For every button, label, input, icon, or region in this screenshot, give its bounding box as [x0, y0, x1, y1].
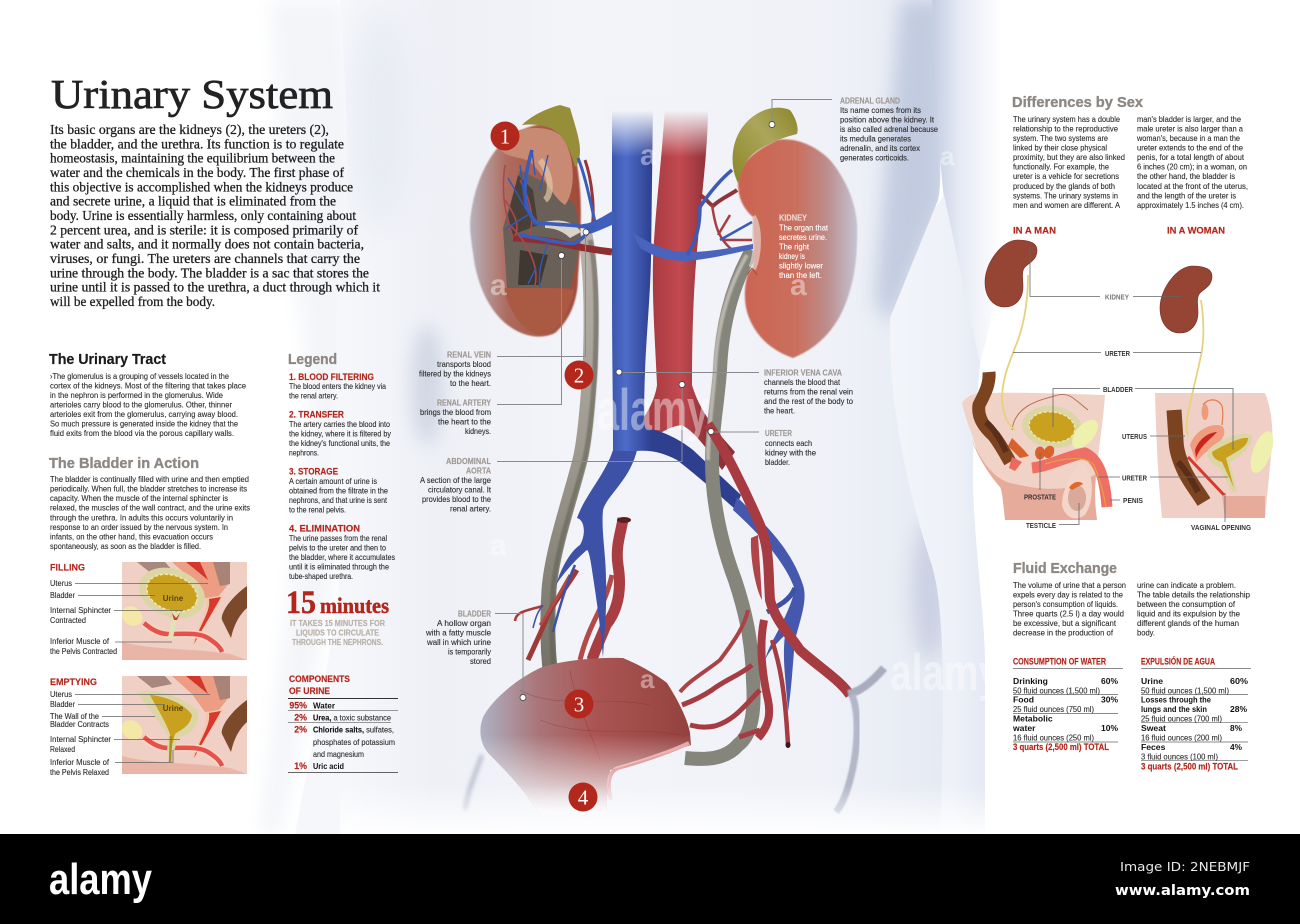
section: fluid exchange: liquid and its expulsion by the — [1137, 608, 1240, 618]
leader lines — [495, 100, 832, 697]
left leg veins and arteries — [515, 450, 637, 660]
section: legend: to the renal pelvis. — [289, 504, 346, 514]
label: renal vein — [419, 350, 492, 388]
diagram: emptying: the Pelvis Relaxed — [50, 767, 109, 777]
section: the urinary tract: fluid exits from the blood via the porous capillary walls. — [50, 428, 234, 438]
section: differences by sex: men and women are different. A — [1013, 200, 1120, 210]
table: expulsion of water: lungs and the skin — [1141, 704, 1207, 714]
pelvis body, woman — [1155, 393, 1272, 518]
section: the urinary tract: arterioles exit from the glomerulus, carrying away blood. — [50, 409, 238, 419]
table: expulsion of water: 8% — [1230, 723, 1242, 733]
section: fluid exchange: The table details the relationship — [1137, 590, 1250, 600]
label: abdominal aorta: A section of the large — [420, 475, 491, 485]
table: expulsion of water: 3 quarts (2,500 ml) TOTAL — [1141, 762, 1239, 772]
label: renal vein: RENAL VEIN — [447, 350, 491, 360]
label: bladder: with a fatty muscle — [425, 628, 491, 638]
kidney, woman — [1160, 266, 1212, 333]
number marker 3: 3 — [574, 692, 584, 716]
footer image id: Image ID: 2NEBMJF — [1120, 860, 1250, 874]
label: abdominal aorta: circulatory canal. It — [428, 484, 491, 494]
watermarks: a — [490, 529, 507, 562]
right ureter — [685, 250, 754, 759]
diagram: filling: Inferior Muscle of — [50, 636, 110, 646]
label: ureter: connects each — [765, 438, 812, 448]
table: components of urine: 1% — [294, 761, 307, 771]
table: consumption of water: 3 quarts (2,500 ml) TOTAL — [1013, 742, 1110, 752]
section: legend — [288, 351, 396, 581]
section: legend: 2. TRANSFER — [289, 410, 345, 420]
bladder — [465, 658, 691, 815]
number marker 2: 2 — [574, 364, 584, 388]
label: ureter: kidney with the — [765, 448, 816, 458]
label: inferior vena cava: the heart. — [764, 406, 795, 416]
section: legend: The urine passes from the renal — [289, 533, 387, 543]
section: the bladder in action: relaxed, the muscles of the wall contract, and the urine exits — [50, 503, 251, 513]
intro text block: homeostasis, maintaining the equilibrium between the — [50, 152, 335, 167]
leader dots — [520, 122, 775, 700]
label: ureter: bladder. — [765, 457, 790, 467]
intro text block: urine until it is passed to the urethra, a duct through which it — [50, 281, 380, 296]
diagram: emptying — [50, 676, 247, 777]
section: fluid exchange: Three quarts (2.5 l) a day would — [1013, 608, 1124, 618]
label: adrenal gland: Its name comes from its — [840, 105, 922, 115]
colon, man — [979, 372, 1010, 462]
watermarks: a — [640, 139, 657, 172]
callout: 15 minutes: IT TAKES 15 MINUTES FOR — [290, 619, 385, 628]
table: expulsion of water: Sweat — [1141, 723, 1166, 733]
label: kidney: KIDNEY — [779, 214, 808, 222]
intro text block: and secrete urine, a liquid that is eliminated from the — [50, 195, 336, 210]
label: renal vein: to the heart. — [450, 378, 491, 388]
diagram: emptying: The Wall of the — [50, 711, 99, 721]
penis and testicle, man — [1032, 453, 1107, 511]
section: fluid exchange: urine can indicate a problem. — [1137, 580, 1236, 590]
table: expulsion of water: 28% — [1230, 704, 1247, 714]
diagram: filling — [50, 559, 247, 660]
section: the bladder in action: through the urethra. In adults this occurs voluntarily in — [50, 512, 233, 522]
bladder cross-section, emptying: Urine — [163, 704, 184, 713]
renal veins and arteries, left kidney — [503, 150, 614, 288]
table: consumption of water: 30% — [1101, 694, 1118, 704]
intro text block: this objective is accomplished when the kidneys produce — [50, 180, 353, 195]
diagram: in a woman — [1155, 226, 1278, 518]
label: abdominal aorta: provides blood to the — [422, 494, 491, 504]
bladder cross-section, emptying — [118, 676, 247, 774]
comparison labels between man and woman: BLADDER — [1103, 387, 1133, 394]
table: consumption of water: 16 fluid ounces (250 ml) — [1013, 732, 1094, 742]
colon, woman — [1174, 410, 1204, 502]
label: adrenal gland — [840, 96, 938, 162]
comparison labels between man and woman — [1013, 247, 1252, 532]
section: differences by sex: approximately 1.5 inches (4 cm). — [1137, 200, 1244, 210]
section: legend: the bladder, where it accumulates — [289, 552, 396, 562]
section: legend: tube-shaped urethra. — [289, 571, 353, 581]
uterus, woman — [1188, 400, 1224, 495]
label: bladder: is temporarily — [448, 646, 492, 656]
label: renal artery — [420, 398, 492, 436]
left kidney with cutaway — [470, 124, 581, 337]
comparison labels between man and woman: VAGINAL OPENING — [1191, 525, 1252, 532]
illustration: urinary organs — [340, 95, 990, 834]
section: fluid exchange: person's consumption of liquids. — [1013, 599, 1118, 609]
section: the urinary tract: So much pressure is generated inside the kidney that the — [50, 418, 238, 428]
callout: 15 minutes — [286, 585, 389, 647]
table: expulsion of water: 16 fluid ounces (200 ml) — [1141, 732, 1222, 742]
label: kidney: slightly lower — [779, 260, 823, 270]
right adrenal gland — [733, 108, 798, 183]
intro text block — [50, 123, 380, 310]
section: differences by sex: linked by their close physical — [1013, 143, 1107, 153]
organ callouts — [419, 96, 938, 812]
section: fluid exchange — [1013, 560, 1250, 638]
section: legend: obtained from the filtrate in the — [289, 486, 388, 496]
diagram: filling: the Pelvis Contracted — [50, 646, 117, 656]
label: inferior vena cava — [764, 368, 853, 416]
section: differences by sex: relationship to the reproductive — [1013, 124, 1118, 134]
table: expulsion of water — [1141, 656, 1251, 772]
label: adrenal gland: position above the kidney. It — [840, 114, 935, 124]
section: the bladder in action: periodically. When full, the bladder stretches to increase its — [50, 484, 248, 494]
callout: 15 minutes: minutes — [320, 593, 389, 618]
section: legend: The artery carries the blood into — [289, 419, 390, 429]
diagram: emptying: Uterus — [50, 689, 73, 699]
footer url: www.alamy.com — [1115, 883, 1250, 899]
label: ureter: URETER — [765, 429, 792, 438]
section: differences by sex: functionally. For example, the — [1013, 162, 1109, 172]
section: fluid exchange: The volume of urine that a person — [1013, 580, 1126, 590]
table: consumption of water: 50 fluid ounces (1,500 ml) — [1013, 686, 1100, 696]
table: expulsion of water: 3 fluid ounces (100 ml) — [1141, 752, 1218, 762]
section: differences by sex: 6 inches (20 cm); in a woman, on — [1137, 162, 1247, 172]
label: adrenal gland: ADRENAL GLAND — [840, 96, 900, 106]
label: renal artery: brings the blood from — [420, 407, 491, 417]
prostate and glands, man — [1008, 438, 1056, 471]
label: abdominal aorta: ABDOMINAL — [446, 457, 491, 466]
section: differences by sex: Differences by Sex — [1012, 94, 1144, 111]
label: adrenal gland: generates corticoids. — [840, 152, 909, 162]
diagram: emptying: EMPTYING — [50, 677, 97, 687]
section: fluid exchange: different glands of the human — [1137, 618, 1239, 628]
label: renal artery: RENAL ARTERY — [437, 398, 492, 408]
leader lines, filling — [75, 584, 208, 642]
label: inferior vena cava: INFERIOR VENA CAVA — [764, 368, 842, 378]
section: fluid exchange: expels every day is related to the — [1013, 590, 1123, 600]
section: differences by sex: ureter is a vehicle for secretions — [1013, 171, 1120, 181]
intro text block: urine through the body. The bladder is a sac that stores the — [50, 266, 369, 281]
section: differences by sex: The urinary system has a double — [1013, 114, 1120, 124]
section: the bladder in action: response to an order issued by the nervous system. In — [50, 522, 228, 532]
label: kidney — [779, 214, 829, 280]
section: legend: until it is eliminated through the — [289, 562, 389, 572]
section: differences by sex: and the length of the ureter is — [1137, 190, 1237, 200]
left adrenal gland — [522, 105, 580, 167]
section: legend: the renal artery. — [289, 390, 338, 400]
label: bladder: stored — [470, 656, 491, 666]
section: the urinary tract: arterioles carry blood to the glomerulus. Other, thinner — [50, 400, 232, 410]
label: inferior vena cava: channels the blood that — [764, 377, 840, 387]
comparison labels between man and woman: KIDNEY — [1105, 294, 1129, 302]
table: expulsion of water: 50 fluid ounces (1,500 ml) — [1141, 686, 1229, 696]
watermarks — [490, 139, 1000, 702]
comparison labels between man and woman: PENIS — [1123, 498, 1143, 505]
section: the urinary tract: The Urinary Tract — [49, 351, 166, 368]
label: kidney: than the left. — [779, 270, 822, 280]
intro text block: 2 percent urea, and is sterile: it is composed primarily of — [50, 223, 358, 238]
section: differences by sex: systems. The urinary systems in — [1013, 190, 1118, 200]
section: differences by sex: man's bladder is larger, and the — [1137, 114, 1241, 124]
label: renal artery: the heart to the — [438, 416, 491, 426]
table: consumption of water: CONSUMPTION OF WATER — [1013, 656, 1107, 666]
table: consumption of water — [1012, 656, 1123, 752]
section: legend: 3. STORAGE — [289, 466, 338, 476]
diagram: filling: Uterus — [50, 578, 73, 588]
table: expulsion of water: Losses through the — [1141, 694, 1211, 704]
right leg arteries — [680, 424, 884, 812]
bladder, woman — [1207, 428, 1278, 492]
intro text block: the bladder, and the urethra. Its function is to regulate — [50, 137, 344, 152]
body: arm and hip shading — [260, 0, 1005, 834]
watermarks: alamy — [597, 378, 709, 443]
number marker 3 — [564, 690, 594, 718]
label: bladder: A hollow organ — [437, 618, 491, 628]
table: consumption of water: water — [1012, 723, 1036, 733]
section: differences by sex: the other hand, the bladder is — [1137, 171, 1236, 181]
diagram: in a woman: IN A WOMAN — [1167, 226, 1225, 236]
table: expulsion of water: EXPULSIÓN DE AGUA — [1141, 656, 1216, 666]
section: legend: Legend — [288, 351, 337, 368]
label: renal artery: kidneys. — [465, 426, 491, 436]
intro text block: viruses, or fungi. The ureters are channels that carry the — [50, 252, 360, 267]
comparison labels between man and woman: PROSTATE — [1024, 494, 1056, 502]
section: the urinary tract: in the nephron is performed in the glomerulus. Wide — [50, 390, 223, 400]
table: expulsion of water: Feces — [1141, 742, 1166, 752]
table: expulsion of water: Urine — [1141, 676, 1163, 686]
table: expulsion of water: 25 fluid ounces (700 ml) — [1141, 714, 1222, 724]
table: consumption of water: 25 fluid ounces (750 ml) — [1013, 704, 1094, 714]
table: components of urine: Uric acid — [313, 761, 344, 771]
footer bar — [0, 834, 1300, 924]
table: components of urine: and magnesium — [313, 749, 364, 759]
section: the bladder in action: The Bladder in Action — [49, 455, 199, 472]
callout: 15 minutes: THROUGH THE NEPHRONS. — [292, 638, 383, 647]
kidney, man — [985, 240, 1037, 307]
ureter, woman — [1187, 300, 1204, 436]
table: expulsion of water: 60% — [1230, 676, 1248, 686]
diagram: in a man — [962, 226, 1107, 520]
section: fluid exchange: decrease in the production of — [1013, 628, 1114, 638]
intro text block: will be expelled from the body. — [50, 295, 215, 310]
ureter, man — [1002, 275, 1028, 430]
number marker 2 — [564, 360, 594, 390]
left ureter — [548, 235, 596, 670]
watermarks: a — [940, 141, 955, 171]
section: fluid exchange: body. — [1137, 628, 1155, 638]
intro text block: water and the chemicals in the body. The first phase of — [50, 166, 344, 181]
table: components of urine: 95% — [289, 700, 307, 710]
section: differences by sex: located at the front of the uterus, — [1137, 181, 1248, 191]
table: components of urine: 2% — [294, 712, 307, 722]
diagram: emptying: Relaxed — [50, 744, 75, 754]
body: torso — [295, 0, 948, 834]
section: the urinary tract: ›The glomerulus is a grouping of vessels located in the — [50, 371, 229, 381]
label: bladder: BLADDER — [458, 610, 491, 618]
table: consumption of water: Food — [1013, 694, 1034, 704]
number marker 1: 1 — [500, 124, 510, 148]
diagram: emptying: Bladder Contracts — [50, 719, 110, 729]
comparison labels between man and woman: URETER — [1105, 351, 1130, 358]
bladder, man — [1012, 394, 1103, 453]
label: inferior vena cava: returns from the renal vein — [764, 386, 853, 396]
bottom fade — [340, 785, 990, 834]
bladder cross-section, filling — [118, 559, 247, 660]
diagram: emptying: Bladder — [50, 699, 75, 709]
label: kidney: The organ that — [779, 222, 829, 232]
number marker 4 — [568, 782, 598, 812]
diagram: in a man: IN A MAN — [1013, 226, 1056, 236]
title: Urinary System — [51, 71, 333, 117]
label: kidney: The right — [779, 242, 810, 252]
diagram: filling: FILLING — [50, 562, 85, 572]
right kidney — [738, 139, 857, 358]
section: legend: The blood enters the kidney via — [289, 381, 386, 391]
label: abdominal aorta — [420, 457, 491, 514]
section: differences by sex: proximity, but they are also linked — [1013, 152, 1125, 162]
section: legend: nephrons. — [289, 448, 319, 458]
comparison labels between man and woman: TESTICLE — [1026, 523, 1056, 530]
table: components of urine — [288, 674, 398, 772]
renal veins and arteries, right kidney — [632, 170, 753, 261]
watermarks: alamy — [890, 644, 1000, 702]
label: ureter — [765, 429, 816, 467]
table: components of urine: Chloride salts, sulfates, — [313, 724, 394, 734]
section: differences by sex — [1012, 94, 1248, 210]
table: components of urine: Water — [313, 700, 336, 710]
section: legend: 4. ELIMINATION — [289, 524, 360, 534]
label: renal vein: filtered by the kidneys — [419, 368, 492, 378]
section: differences by sex: produced by the glands of both — [1013, 181, 1115, 191]
section: the bladder in action: The bladder is continually filled with urine and then emptied — [50, 474, 249, 484]
label: kidney: secretes urine. — [779, 232, 827, 242]
label: inferior vena cava: and the rest of the body to — [764, 396, 853, 406]
top fade over great vessels — [606, 95, 714, 157]
watermarks: a — [790, 269, 807, 302]
section: differences by sex: male ureter is also larger than a — [1137, 124, 1243, 134]
section: differences by sex: system. The two systems are — [1013, 133, 1108, 143]
section: legend: the kidney, where it is filtered by — [289, 428, 392, 438]
label: adrenal gland: is also called adrenal because — [840, 124, 938, 134]
table: consumption of water: Drinking — [1013, 676, 1048, 686]
leader lines, emptying — [75, 694, 210, 762]
inferior vena cava — [612, 105, 805, 712]
section: legend: pelvis to the ureter and then to — [289, 542, 386, 552]
diagram: emptying: Internal Sphincter — [50, 734, 111, 744]
diagram: filling: Bladder — [50, 590, 75, 600]
pelvis body, man — [962, 393, 1105, 520]
table: expulsion of water: 4% — [1230, 742, 1242, 752]
label: abdominal aorta: renal artery. — [450, 504, 491, 514]
table: components of urine: phosphates of potassium — [313, 737, 395, 747]
section: differences by sex: woman's, because in a man the — [1136, 133, 1240, 143]
section: legend: nephrons, and that urine is sent — [289, 495, 387, 505]
label: adrenal gland: adrenalin, and its cortex — [840, 143, 921, 153]
watermarks: a — [490, 269, 507, 302]
section: differences by sex: penis, for a total length of about — [1137, 152, 1245, 162]
table: consumption of water: 60% — [1101, 676, 1118, 686]
comparison labels between man and woman: UTERUS — [1122, 434, 1147, 441]
section: fluid exchange: be excessive, but a significant — [1013, 618, 1117, 628]
label: bladder — [425, 610, 492, 666]
label: bladder: wall in which urine — [426, 637, 491, 647]
intro text block: Its basic organs are the kidneys (2), the ureters (2), — [50, 123, 329, 138]
table: components of urine: OF URINE — [289, 686, 330, 696]
bladder cross-section, filling: Urine — [163, 594, 184, 603]
intro text block: body. Urine is essentially harmless, only containing about — [50, 209, 356, 224]
section: the urinary tract — [49, 351, 246, 438]
section: the bladder in action: capacity. When the muscle of the internal sphincter is — [50, 493, 229, 503]
section: legend: A certain amount of urine is — [289, 476, 378, 486]
callout: 15 minutes: 15 — [286, 585, 316, 621]
watermarks: a — [640, 664, 655, 694]
section: the bladder in action: spontaneously, as soon as the bladder is filled. — [50, 541, 201, 551]
label: kidney: kidney is — [779, 251, 805, 261]
table: consumption of water: Metabolic — [1013, 714, 1053, 724]
label: renal vein: transports blood — [437, 359, 491, 369]
label: abdominal aorta: AORTA — [466, 466, 491, 476]
comparison labels between man and woman: URETER — [1122, 476, 1147, 482]
section: fluid exchange: between the consumption of — [1137, 599, 1236, 609]
table: consumption of water: 10% — [1101, 723, 1118, 733]
table: components of urine: Urea, a toxic substance — [313, 712, 391, 722]
intro text block: water and salts, and it normally does not contain bacteria, — [50, 238, 364, 253]
section: legend: the kidney's functional units, the — [289, 438, 390, 448]
section: the bladder in action — [49, 455, 251, 551]
number marker 4: 4 — [578, 786, 589, 810]
diagram: filling: Contracted — [50, 615, 86, 625]
aorta — [632, 105, 735, 470]
section: fluid exchange: Fluid Exchange — [1013, 560, 1117, 577]
number marker 1 — [490, 122, 520, 150]
section: differences by sex: ureter extends to the end of the — [1137, 143, 1243, 153]
section: the bladder in action: infants, on the other hand, this evacuation occurs — [50, 531, 214, 541]
section: legend: 1. BLOOD FILTERING — [289, 372, 374, 382]
callout: 15 minutes: LIQUIDS TO CIRCULATE — [296, 628, 379, 638]
table: components of urine: 2% — [294, 724, 307, 734]
label: adrenal gland: its medulla generates — [840, 134, 912, 144]
footer logo: alamy — [49, 855, 152, 904]
diagram: filling: Internal Sphincter — [50, 605, 111, 615]
section: the urinary tract: cortex of the kidneys. Most of the filtering that takes place — [50, 380, 246, 390]
table: components of urine: COMPONENTS — [289, 674, 350, 684]
diagram: emptying: Inferior Muscle of — [50, 757, 110, 767]
